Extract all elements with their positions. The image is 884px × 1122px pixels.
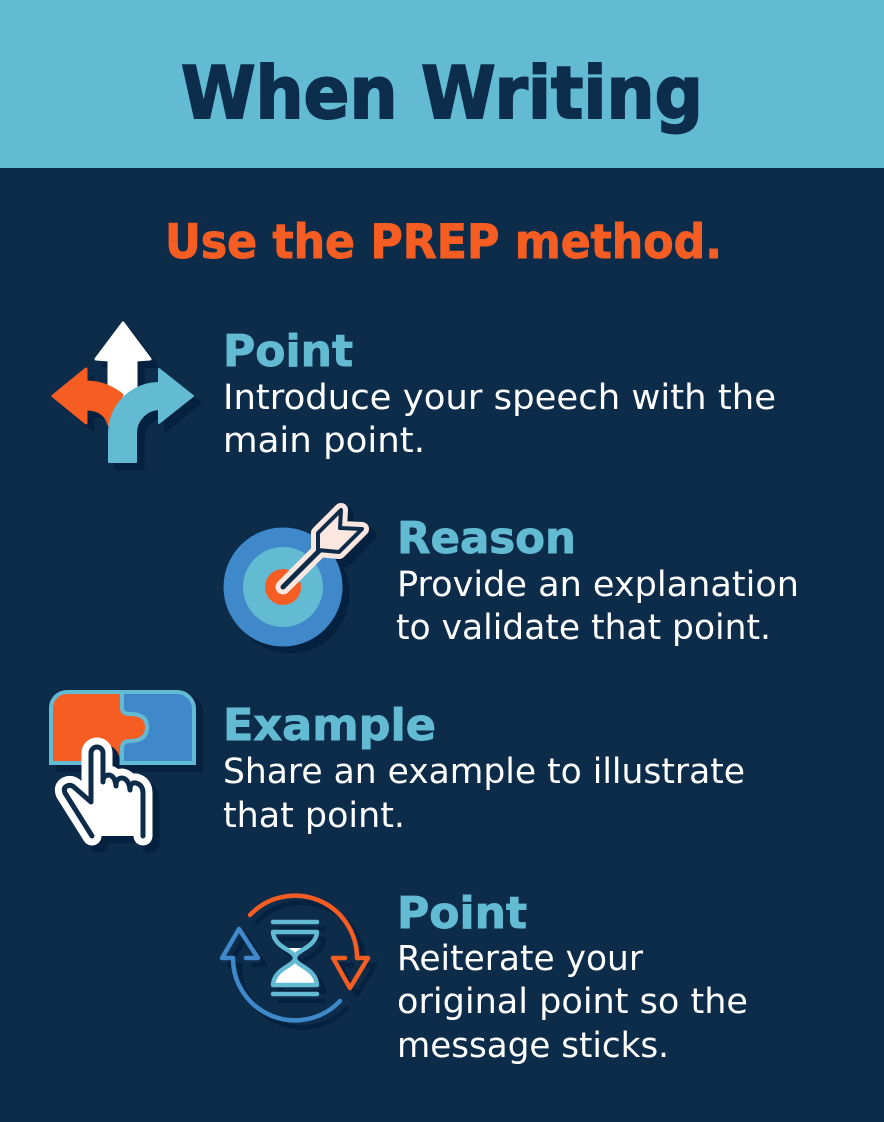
- step 3: Example: [51, 692, 745, 843]
- subtitle: Use the PREP method.: [165, 215, 722, 270]
- heading: Reason: [397, 513, 576, 564]
- icon: three-way arrows: [53, 323, 200, 469]
- description: [223, 752, 745, 836]
- icon: puzzle and pointing hand: [51, 692, 203, 843]
- description: Introduce your speech with the: [223, 378, 776, 418]
- description: that point.: [223, 796, 405, 836]
- description: [223, 378, 776, 461]
- icon: hourglass with cycle arrows: [222, 896, 375, 1027]
- step 1: Point: [53, 323, 776, 469]
- description: to validate that point.: [396, 608, 771, 648]
- step 2: Reason: [224, 510, 799, 654]
- description: main point.: [223, 421, 425, 461]
- description: Share an example to illustrate: [223, 752, 745, 792]
- heading: Point: [223, 326, 353, 377]
- description: [396, 565, 799, 648]
- icon: target with arrow: [224, 510, 370, 654]
- description: message sticks.: [397, 1026, 669, 1066]
- title: When Writing: [181, 51, 703, 135]
- heading: Example: [223, 700, 436, 751]
- step 4: Point: [222, 888, 748, 1066]
- heading: Point: [397, 888, 527, 939]
- description: [397, 939, 748, 1066]
- description: Provide an explanation: [397, 565, 799, 605]
- description: Reiterate your: [397, 939, 644, 979]
- header band: [0, 0, 884, 168]
- description: original point so the: [397, 982, 748, 1022]
